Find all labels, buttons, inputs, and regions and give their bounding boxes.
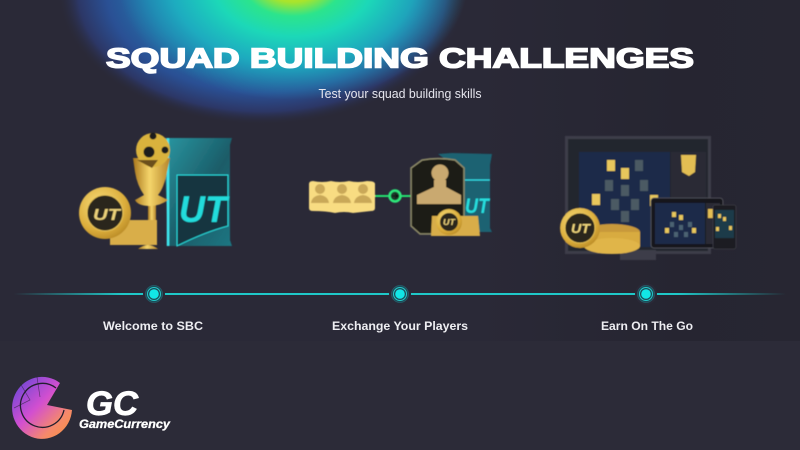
logo wordmark GC: GC [86, 385, 138, 423]
icon: UT coin: UT [93, 207, 122, 224]
icon: black player card [411, 158, 464, 234]
label: welcome to SBC: Welcome to SBC [103, 319, 203, 333]
icon: three player cards [309, 181, 375, 213]
icon: small UT coin [431, 209, 480, 236]
logo mark [12, 377, 72, 439]
icon: UT coin [79, 187, 157, 245]
illustration: welcome to SBC [79, 132, 232, 249]
timeline node 1 [143, 283, 165, 305]
logo: GameCurrency [12, 377, 171, 439]
icon: UT pack [164, 138, 232, 246]
icon: coin stack: UT [571, 221, 591, 236]
icon: small UT coin: UT [443, 218, 456, 227]
arrow connector [375, 190, 412, 202]
icon: UT pack: UT [179, 189, 230, 230]
illustration: exchange your players [309, 153, 492, 236]
illustration: earn on the go [560, 136, 736, 260]
icon: UT pack behind card [438, 153, 492, 232]
subtitle: Test your squad building skills [318, 87, 482, 101]
logo wordmark GameCurrency: GameCurrency [79, 419, 171, 431]
icon: desktop monitor [565, 136, 711, 260]
icon: phone [713, 205, 736, 249]
icon: coin stack [560, 208, 640, 254]
icon: gold trophy [133, 132, 170, 249]
timeline [14, 283, 786, 305]
title: SQUAD BUILDING CHALLENGES [106, 43, 694, 74]
timeline node 2 [389, 283, 411, 305]
timeline node 3 [635, 283, 657, 305]
top glow [50, 0, 475, 130]
label: exchange your players: Exchange Your Players [332, 319, 468, 333]
label: earn on the go: Earn On The Go [601, 319, 693, 333]
icon: tablet [651, 198, 723, 248]
icon: UT pack behind card: UT [465, 195, 491, 218]
